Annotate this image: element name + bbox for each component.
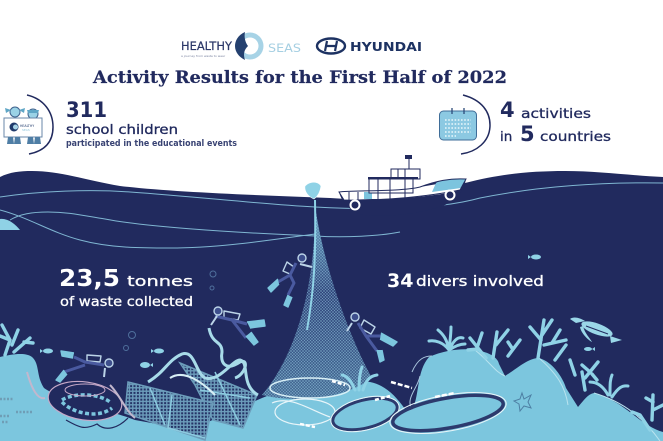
stat: divers involved: 34 — [387, 270, 413, 292]
stat: school children: 311 — [66, 98, 107, 122]
whale fin at left edge — [0, 219, 20, 230]
buoy — [305, 182, 321, 199]
stat: tonnes of waste: 23,5 — [59, 266, 120, 292]
title: Activity Results for the First Half of 2022 — [92, 68, 507, 88]
stat: school children: school children — [66, 122, 178, 138]
diver at left — [56, 351, 113, 382]
net — [262, 200, 372, 399]
starfish — [514, 393, 531, 411]
logo: Healthy Seas: HEALTHY — [181, 39, 233, 53]
stat: activities and countries: in — [500, 129, 512, 145]
sea background — [0, 171, 663, 441]
stat: divers involved — [387, 270, 544, 292]
stat: school children: participated in the educational events — [66, 139, 237, 149]
icon: calendar — [440, 95, 490, 154]
lobster traps and ropes — [125, 328, 258, 440]
logo: Healthy Seas: a journey from waste to wear — [181, 54, 226, 58]
stat: activities and countries — [500, 98, 611, 146]
tire rings and ropes — [270, 378, 509, 441]
diver at right — [347, 313, 397, 362]
water current lines — [0, 183, 663, 248]
logo: Hyundai — [317, 38, 422, 54]
logo: Hyundai: HYUNDAI — [350, 39, 422, 54]
ghost net pile — [27, 372, 135, 428]
stat: activities and countries: activities — [521, 106, 591, 122]
stat: tonnes of waste: tonnes — [127, 274, 193, 290]
stat: school children — [66, 98, 237, 149]
stat: activities and countries: 4 — [500, 98, 515, 122]
fish — [40, 254, 595, 368]
stat: activities and countries: 5 — [520, 122, 535, 146]
logo: Healthy Seas: SEAS — [268, 41, 301, 55]
seagrass and coral — [0, 320, 663, 430]
diver above traps — [211, 307, 265, 345]
seabed — [0, 349, 663, 441]
logo: Healthy Seas — [181, 32, 301, 60]
diver at net — [268, 254, 312, 307]
ship — [339, 155, 466, 216]
icon: children with banner: HEALTHY — [20, 124, 34, 128]
bubbles — [124, 271, 216, 350]
stat: activities and countries: countries — [540, 129, 611, 145]
stat: tonnes of waste: of waste collected — [60, 295, 193, 310]
stat: divers involved: divers involved — [416, 274, 544, 290]
sea turtle — [570, 318, 622, 343]
stat: tonnes of waste — [59, 266, 193, 310]
icon: children with banner: SEAS — [22, 128, 30, 132]
icon: children with banner — [4, 95, 53, 154]
small corals on the left seabed — [0, 399, 32, 422]
